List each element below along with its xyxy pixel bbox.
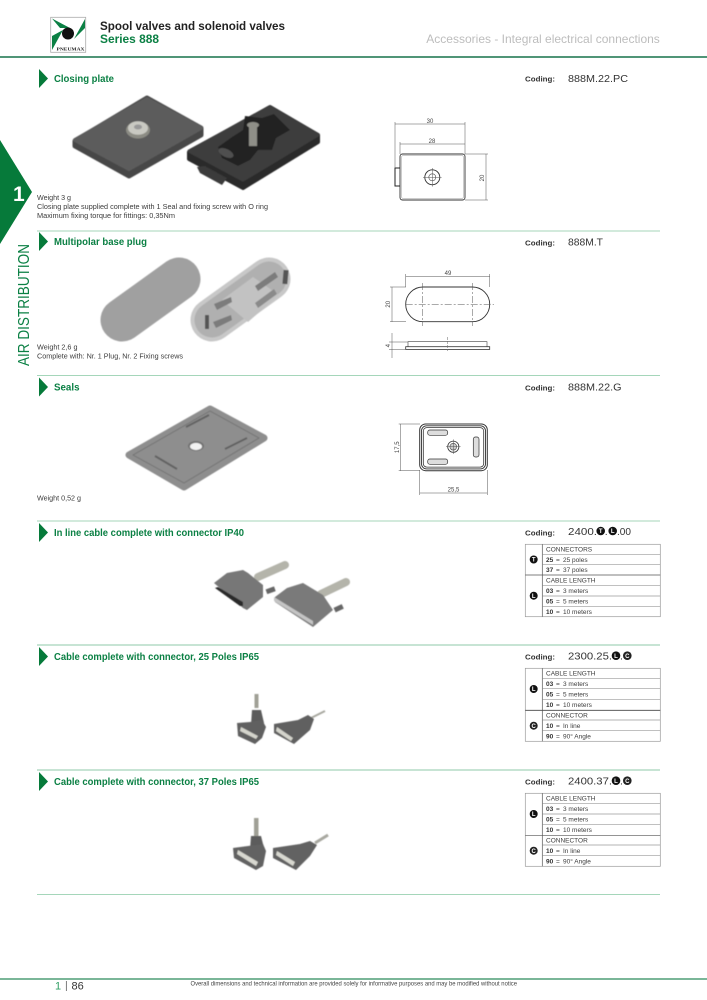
panel: 25 poles cable (39, 647, 660, 744)
title: Spool valves and solenoid valves (100, 19, 285, 33)
coding: 2400.37. (568, 776, 612, 788)
description: Weight 3 g (37, 195, 71, 202)
coding: .00 (617, 526, 631, 538)
arrow marker (39, 523, 48, 542)
table: cable length and connector: In line (563, 723, 581, 730)
table: connectors and cable length: 37 (546, 567, 554, 574)
chapter number: 1 (55, 980, 61, 992)
technical drawing: closing plate: 20 (480, 174, 486, 181)
technical drawing: seal: 17,5 (395, 441, 401, 453)
coding (525, 382, 622, 394)
table: cable length and connector: = (556, 681, 560, 688)
arrow marker (39, 232, 48, 251)
logo: Pneumax (51, 17, 86, 52)
table: connectors and cable length: = (556, 557, 560, 564)
photo: connectors 37 poles (233, 818, 328, 870)
table: cable length and connector (525, 793, 660, 866)
heading: Cable complete with connector, 37 Poles IP65 (54, 777, 259, 788)
coding (525, 73, 628, 85)
table: connectors and cable length: = (556, 609, 560, 616)
coding: L (614, 779, 618, 785)
table: cable length and connector: = (556, 702, 560, 709)
table: cable length and connector: 90 (546, 858, 554, 866)
table: cable length and connector: = (556, 691, 560, 698)
table: cable length and connector: In line (563, 848, 581, 855)
description: Maximum fixing torque for fittings: 0,35Nm (37, 213, 175, 220)
table: cable length and connector: 5 meters (563, 691, 589, 698)
technical drawing: plug: 49 (445, 271, 452, 277)
arrow marker (39, 69, 48, 88)
subtitle: Series 888 (100, 32, 159, 46)
photo: plugs (122, 270, 289, 329)
description (37, 195, 268, 220)
description: Complete with: Nr. 1 Plug, Nr. 2 Fixing screws (37, 354, 184, 360)
panel: multipolar base plug (37, 232, 604, 360)
heading: In line cable complete with connector IP40 (54, 528, 244, 539)
photo: closing plates (75, 98, 318, 188)
table: cable length and connector: 90° Angle (563, 732, 591, 740)
table: connectors and cable length: 10 (546, 609, 554, 616)
coding: . (620, 650, 623, 662)
technical drawing: closing plate: 28 (429, 139, 436, 145)
coding: 888M.22.PC (568, 73, 628, 85)
table: cable length and connector: 10 meters (563, 827, 593, 834)
table: cable length and connector: 05 (546, 816, 554, 824)
header (51, 17, 660, 52)
coding: T (599, 529, 603, 535)
page number: 86 (72, 980, 84, 992)
footer (0, 979, 707, 992)
table: cable length and connector: C (532, 724, 537, 730)
technical drawing: plug (386, 271, 494, 358)
coding: Coding: (525, 74, 555, 84)
coding (525, 776, 632, 788)
photo: connectors IP40 (214, 565, 346, 627)
coding (525, 526, 631, 538)
table: cable length and connector: 3 meters (563, 806, 589, 813)
coding: C (625, 779, 630, 785)
table: connectors and cable length: CONNECTORS (546, 547, 593, 554)
coding: Coding: (525, 384, 555, 392)
table: connectors and cable length: = (556, 567, 560, 574)
panel: seals (37, 378, 622, 502)
description: Closing plate supplied complete with 1 Seal and fixing screw with O ring (37, 204, 268, 211)
table: connectors and cable length: = (556, 588, 560, 595)
table: cable length and connector (525, 668, 660, 741)
table: cable length and connector: C (532, 849, 537, 855)
side label: air distribution: AIR DISTRIBUTION (16, 244, 33, 366)
coding: Coding: (525, 652, 555, 662)
table: connectors and cable length: T (532, 558, 536, 564)
logo: Pneumax: PNEUMAX (56, 46, 84, 51)
panel: closing plate (37, 69, 628, 220)
coding: L (611, 529, 615, 535)
table: connectors and cable length: 3 meters (563, 588, 589, 595)
table: cable length and connector: CABLE LENGTH (546, 796, 596, 803)
heading: Seals (54, 382, 80, 394)
table: cable length and connector: 3 meters (563, 681, 589, 688)
coding: Coding: (525, 778, 555, 786)
table: connectors and cable length: 10 meters (563, 609, 593, 616)
table: cable length and connector: CABLE LENGTH (546, 671, 596, 678)
table: cable length and connector: = (556, 816, 560, 824)
coding: 2400. (568, 526, 597, 538)
coding: 888M.22.G (568, 382, 622, 394)
table: cable length and connector: L (532, 812, 536, 818)
table: connectors and cable length: 25 (546, 557, 554, 564)
table: connectors and cable length: L (532, 594, 536, 600)
table: cable length and connector: 90 (546, 734, 554, 740)
table: connectors and cable length: 25 poles (563, 557, 588, 564)
technical drawing: seal: 25,5 (448, 488, 460, 494)
chapter tab (0, 140, 32, 244)
table: cable length and connector: = (556, 723, 560, 730)
coding: 888M.T (568, 236, 604, 248)
panel: 37 poles cable (39, 772, 660, 870)
photo: seal (129, 409, 264, 487)
heading: Closing plate (54, 74, 114, 85)
table: connectors and cable length: CABLE LENGTH (546, 578, 596, 584)
table: cable length and connector: 90° Angle (563, 858, 591, 866)
table: cable length and connector: 05 (546, 691, 554, 698)
table: cable length and connector: 10 meters (563, 702, 593, 709)
coding: C (625, 654, 630, 660)
table: cable length and connector: = (556, 734, 560, 740)
table: cable length and connector: = (556, 806, 560, 813)
coding: Coding: (525, 528, 555, 538)
table: cable length and connector: CONNECTOR (546, 712, 588, 720)
table: cable length and connector: = (556, 848, 560, 855)
arrow marker (39, 647, 48, 666)
coding: . (620, 776, 623, 788)
disclaimer: Overall dimensions and technical information are provided solely for informative purposes and may be modified without notice (190, 982, 518, 988)
table: connectors and cable length: 37 poles (563, 567, 588, 574)
technical drawing: plug: 20 (386, 300, 392, 308)
table: cable length and connector: 5 meters (563, 816, 589, 824)
table: connectors and cable length (525, 544, 660, 617)
photo: connectors 25 poles (237, 694, 325, 744)
table: cable length and connector: L (532, 687, 536, 693)
coding: 2300.25. (568, 650, 612, 662)
table: cable length and connector: = (556, 827, 560, 834)
arrow marker (39, 772, 48, 791)
arrow marker (39, 378, 48, 396)
coding (525, 236, 604, 248)
technical drawing: closing plate: 30 (427, 119, 434, 125)
description (37, 344, 184, 360)
technical drawing: seal (395, 424, 487, 495)
table: connectors and cable length: 03 (546, 588, 554, 595)
coding (525, 650, 632, 662)
table: connectors and cable length: 05 (546, 598, 554, 606)
description: Weight 2,6 g (37, 344, 78, 352)
table: cable length and connector: 03 (546, 681, 554, 688)
table: cable length and connector: 10 (546, 848, 554, 855)
heading: Cable complete with connector, 25 Poles IP65 (54, 652, 259, 663)
coding: Coding: (525, 238, 555, 248)
chapter tab: 1 (13, 183, 25, 206)
coding: . (605, 526, 608, 538)
header right caption: Accessories - Integral electrical connections (426, 32, 660, 46)
table: cable length and connector: 03 (546, 806, 554, 813)
table: connectors and cable length: = (556, 598, 560, 606)
panel: in line cable (39, 523, 660, 627)
technical drawing: closing plate (395, 119, 488, 200)
heading: Multipolar base plug (54, 237, 147, 248)
table: cable length and connector: 10 (546, 827, 554, 834)
table: cable length and connector: 10 (546, 723, 554, 730)
technical drawing: plug: 4 (386, 343, 392, 347)
description: Weight 0,52 g (37, 496, 81, 502)
table: cable length and connector: = (556, 858, 560, 866)
table: cable length and connector: 10 (546, 702, 554, 709)
table: cable length and connector: CONNECTOR (546, 838, 588, 844)
table: connectors and cable length: 5 meters (563, 598, 589, 606)
coding: L (614, 654, 618, 660)
